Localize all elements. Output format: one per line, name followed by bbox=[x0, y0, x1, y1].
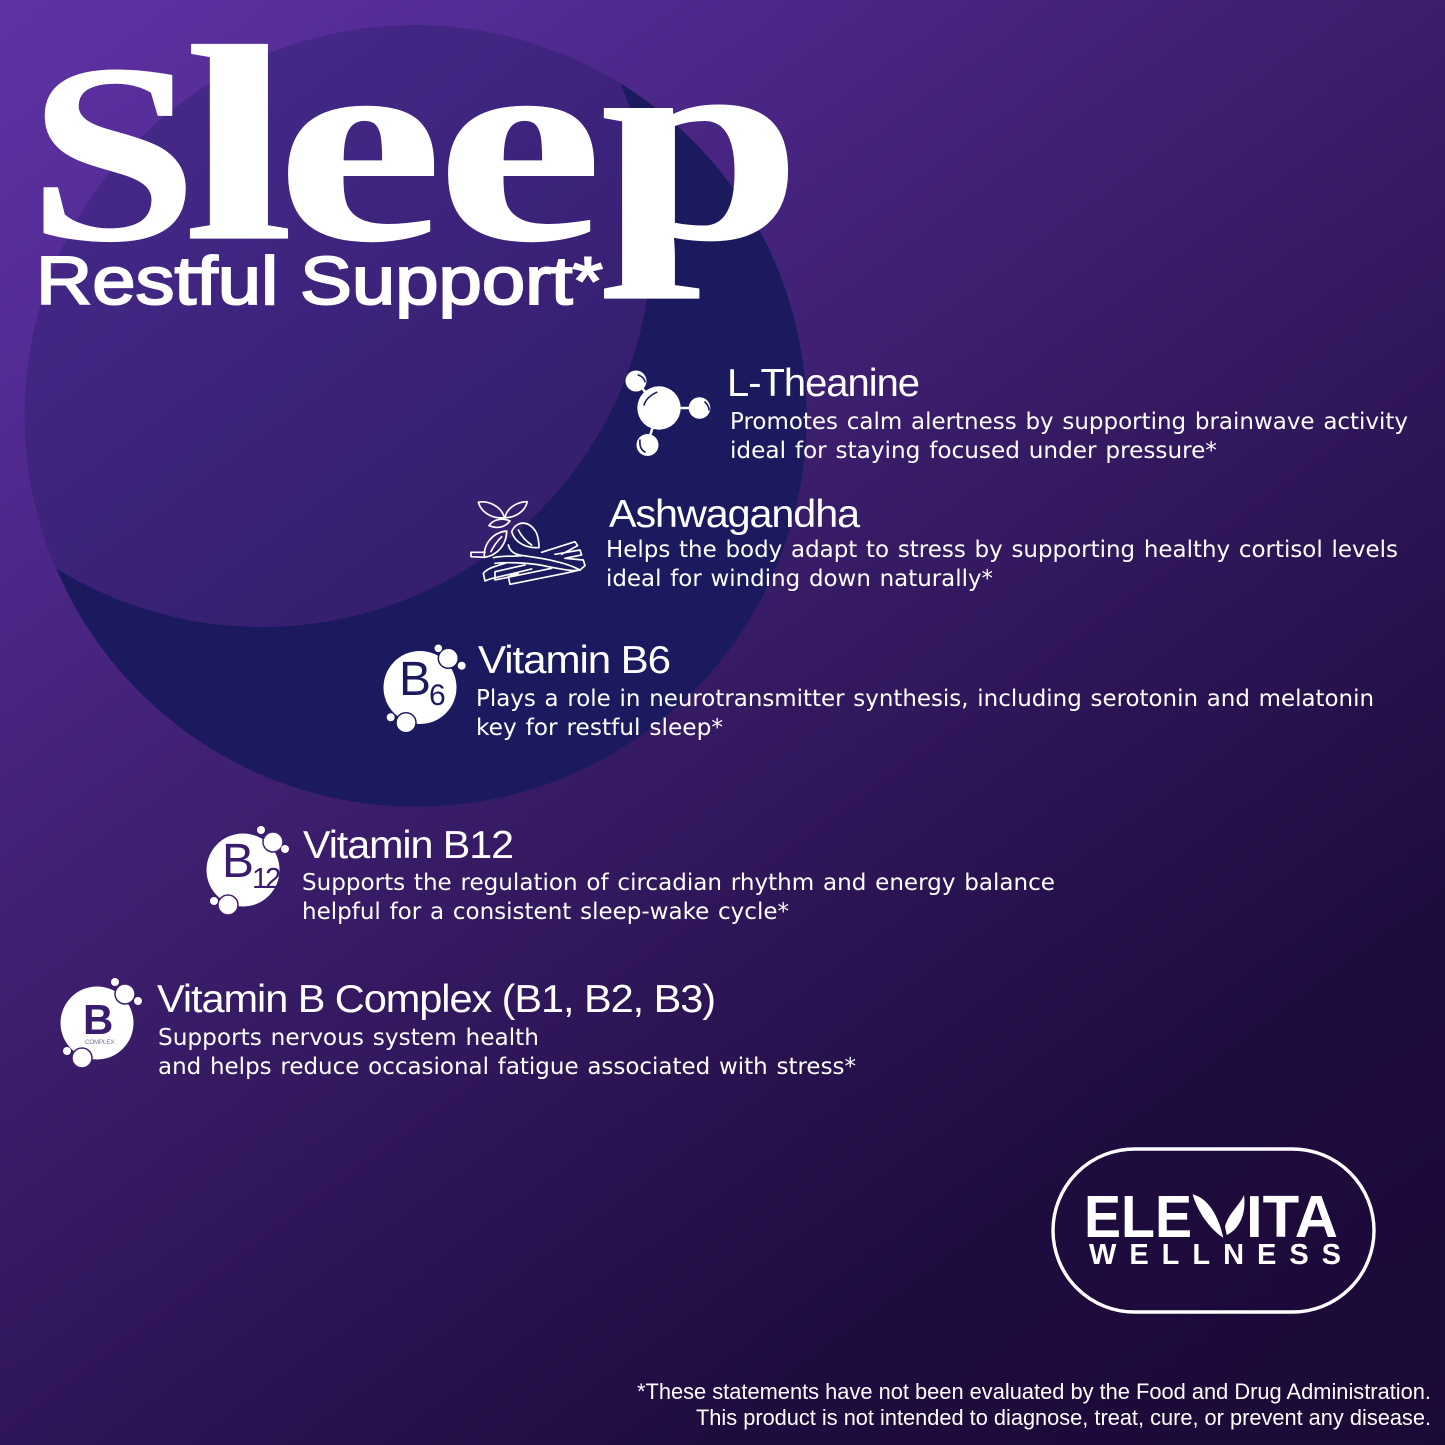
footer disclaimer bbox=[637, 1379, 1431, 1430]
description: ideal for winding down naturally* bbox=[606, 564, 993, 592]
description bbox=[606, 535, 1398, 592]
footer disclaimer: *These statements have not been evaluated by the Food and Drug Administration. bbox=[637, 1379, 1431, 1404]
heading: Vitamin B12 bbox=[303, 824, 513, 867]
icon: B6: B bbox=[399, 653, 430, 706]
heading: Vitamin B6 bbox=[478, 639, 670, 682]
icon: molecule bbox=[626, 370, 710, 456]
title: Sleep: S bbox=[28, 13, 198, 295]
description: Helps the body adapt to stress by supporting healthy cortisol levels bbox=[606, 535, 1398, 563]
ingredient: Vitamin B Complex bbox=[60, 978, 856, 1080]
description: helpful for a consistent sleep-wake cycle* bbox=[302, 897, 789, 925]
heading: Ashwagandha bbox=[609, 493, 860, 536]
icon: ashwagandha herb and roots bbox=[471, 502, 585, 584]
ingredient: Ashwagandha bbox=[471, 493, 1398, 592]
title: Sleep bbox=[28, 0, 802, 300]
heading: L-Theanine bbox=[727, 362, 919, 405]
icon: B6 bbox=[384, 644, 466, 733]
heading: Vitamin B Complex (B1, B2, B3) bbox=[157, 978, 715, 1021]
logo: Elevita Wellness: WELLNESS bbox=[1089, 1239, 1341, 1271]
icon: leaf V bbox=[1193, 1194, 1244, 1238]
icon: B12 bbox=[206, 826, 289, 915]
description bbox=[476, 684, 1374, 741]
ingredient: L-Theanine bbox=[626, 362, 1408, 464]
description: Supports the regulation of circadian rhythm and energy balance bbox=[302, 868, 1055, 896]
description: key for restful sleep* bbox=[476, 713, 723, 741]
icon: B complex bbox=[60, 978, 142, 1068]
icon: B complex: COMPLEX bbox=[85, 1040, 114, 1046]
description: ideal for staying focused under pressure* bbox=[730, 436, 1217, 464]
description bbox=[730, 407, 1408, 464]
description: and helps reduce occasional fatigue associated with stress* bbox=[158, 1052, 856, 1080]
moon graphic bbox=[24, 25, 807, 807]
logo: Elevita Wellness: ELE bbox=[1084, 1184, 1192, 1250]
description: Plays a role in neurotransmitter synthesis, including serotonin and melatonin bbox=[476, 684, 1374, 712]
logo: Elevita Wellness bbox=[1053, 1149, 1374, 1312]
description bbox=[158, 1023, 856, 1080]
icon: B12: B bbox=[222, 835, 253, 888]
logo: Elevita Wellness: ITA bbox=[1246, 1184, 1338, 1250]
ingredient: Vitamin B6 bbox=[384, 639, 1374, 741]
footer disclaimer: This product is not intended to diagnose, treat, cure, or prevent any disease. bbox=[696, 1405, 1431, 1430]
icon: B12: 12 bbox=[252, 863, 280, 895]
description: Supports nervous system health bbox=[158, 1023, 539, 1051]
icon: B6: 6 bbox=[429, 679, 446, 712]
description bbox=[302, 868, 1055, 925]
description: Promotes calm alertness by supporting brainwave activity bbox=[730, 407, 1408, 435]
icon: B complex: B bbox=[83, 996, 113, 1043]
ingredient: Vitamin B12 bbox=[206, 824, 1055, 925]
subtitle: Restful Support: Restful Support* bbox=[36, 243, 603, 319]
